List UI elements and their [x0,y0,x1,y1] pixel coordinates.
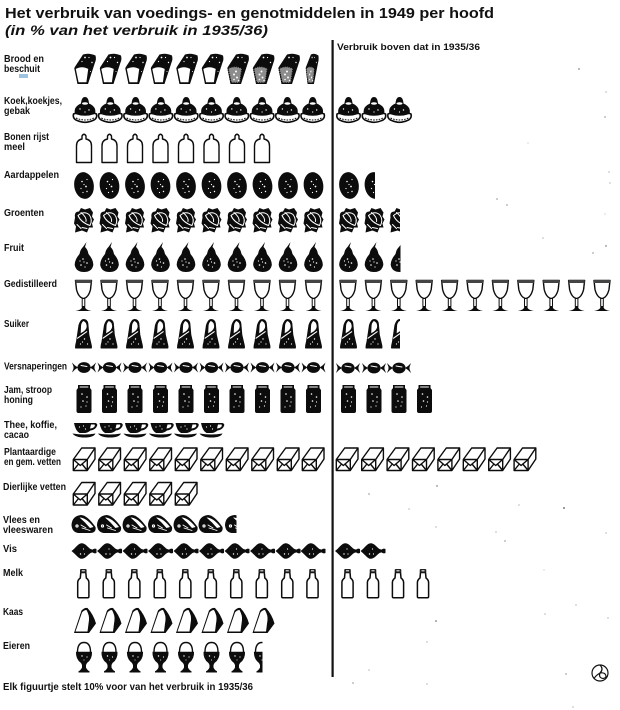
icons: fat packets [73,482,197,505]
row: Kaas [3,607,274,633]
icons: cabbages [74,208,410,232]
icons: cheese wedges [74,608,274,633]
label: Brood en beschuit: beschuit [4,64,41,75]
icons: glasses [76,280,610,311]
row: Eieren [3,641,270,672]
icons: meat cuts [72,515,249,533]
label: Thee, koffie, cacao: Thee, koffie, [4,420,57,431]
label: Plantaardige en gem. vetten: Plantaardige [4,447,56,458]
blue highlight mark [19,74,28,78]
label: Dierlijke vetten: Dierlijke vetten [3,482,66,493]
row: Vis [3,543,386,559]
label: Bonen rijst meel: Bonen rijst [4,132,50,143]
row: Aardappelen [4,170,386,200]
label: Jam, stroop, honing: Jam, stroop [4,385,52,396]
footnote: Elk figuurtje stelt 10% voor van het verbruik in 1935/36 [3,682,253,693]
subtitle: (in % van het verbruik in 1935/36) [5,22,268,38]
label: Bonen rijst meel: meel [4,142,25,153]
label: Melk: Melk [3,568,23,579]
label: Vlees en vleeswaren: Vlees en [3,515,40,526]
icons: bread loaves [74,54,319,84]
row: Brood en beschuit [4,54,319,84]
icons: cups and saucers [72,423,224,438]
icons: pears [75,242,409,272]
label: Jam, stroop, honing: honing [4,395,33,406]
row: Vlees en vleeswaren [3,515,236,533]
column heading: consumption above 1935/36: Verbruik boven dat in 1935/36 [337,42,480,53]
icons: milk bottles [78,569,429,598]
icons: candies [72,362,411,373]
row: Gedistilleerd [4,279,610,311]
label: Vlees en vleeswaren: vleeswaren [3,525,53,536]
label: Vis: Vis [3,544,17,555]
label: Aardappelen: Aardappelen [4,170,59,181]
row: Suiker [4,319,408,348]
icon: artist monogram [592,665,608,681]
label: Brood en beschuit: Brood en [4,54,44,65]
row: Dierlijke vetten [3,482,197,505]
label: Gedistilleerd: Gedistilleerd [4,279,57,290]
label: Fruit: Fruit [4,243,25,254]
icons: potatoes [74,172,375,199]
label: Kaas: Kaas [3,607,23,618]
vertical divider line at 100% of 1935/36 [332,40,334,677]
label: Groenten: Groenten [4,208,44,219]
row: Koek, koekjes, gebak [4,96,411,122]
row: Versnaperingen [4,362,411,373]
label: Eieren: Eieren [3,641,30,652]
row: Fruit [4,242,409,272]
background paper specks [352,68,610,708]
label: Versnaperingen: Versnaperingen [4,362,67,372]
icons: fish [72,543,386,559]
label: Plantaardige en gem. vetten: en gem. vetten [4,457,61,468]
icons: sugar bags [75,319,408,348]
icons: fat packets [73,448,536,470]
row: Groenten [4,208,410,232]
title: Het verbruik van voedings- en genotmiddelen in 1949 per hoofd [5,5,494,22]
row: Melk [3,568,429,598]
icons: eggs in egg cups [76,642,270,672]
row: Plantaardige en gem. vetten [4,447,536,470]
label: Thee, koffie, cacao: cacao [4,430,29,441]
label: Koek, koekjes, gebak: Koek,koekjes, [4,96,62,107]
row: Jam, stroop, honing [4,385,432,413]
row: Bonen rijst meel [4,132,270,162]
label: Suiker: Suiker [4,319,29,330]
icons: bags [76,134,270,162]
icons: jam jars [76,385,432,413]
icons: cakes [73,97,411,122]
label: Koek, koekjes, gebak: gebak [4,106,30,117]
row: Thee, koffie, cacao [4,420,224,441]
